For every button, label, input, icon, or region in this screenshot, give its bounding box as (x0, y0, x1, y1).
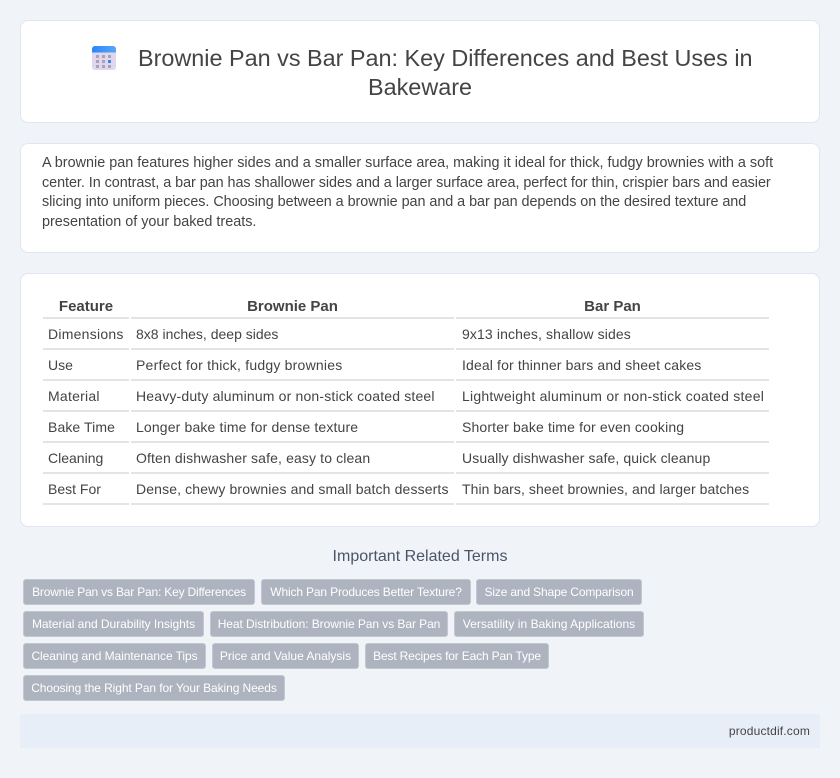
table rows: Bake Time (48, 419, 115, 435)
table rows (43, 317, 769, 505)
footer bar (20, 714, 820, 748)
table rows: 9x13 inches, shallow sides (462, 326, 631, 342)
footer source: productdif.com (729, 724, 810, 738)
comparison table panel (20, 273, 820, 527)
related terms tags: Heat Distribution: Brownie Pan vs Bar Pan (218, 617, 440, 631)
related terms tags: Brownie Pan vs Bar Pan: Key Differences (32, 585, 246, 599)
header panel (20, 20, 820, 123)
table header: Feature (59, 298, 113, 315)
table header (59, 298, 641, 315)
title: Bakeware (368, 74, 472, 100)
table rows: Dimensions (48, 326, 124, 342)
title (138, 45, 753, 100)
related terms tags: Versatility in Baking Applications (463, 617, 635, 631)
title: Brownie Pan vs Bar Pan: Key Differences and Best Uses in (138, 45, 753, 71)
related terms tags: Best Recipes for Each Pan Type (373, 649, 541, 663)
intro paragraph: center. In contrast, a bar pan has shallower sides and a larger surface area, perfect for thin, crispier bars and easier (42, 174, 771, 190)
table rows: Heavy-duty aluminum or non-stick coated steel (136, 388, 435, 404)
related terms tags: Price and Value Analysis (220, 649, 351, 663)
intro paragraph: presentation of your baked treats. (42, 214, 256, 230)
related terms tags: Cleaning and Maintenance Tips (31, 649, 198, 663)
related terms tags: Material and Durability Insights (32, 617, 195, 631)
table rows: Perfect for thick, fudgy brownies (136, 357, 342, 373)
table rows: Best For (48, 481, 101, 497)
intro paragraph: slicing into uniform pieces. Choosing between a brownie pan and a bar pan depends on the desired texture and (42, 194, 746, 210)
intro paragraph: A brownie pan features higher sides and a smaller surface area, making it ideal for thick, fudgy brownies with a soft (42, 155, 773, 171)
table rows: Longer bake time for dense texture (136, 419, 358, 435)
related terms tags: Size and Shape Comparison (484, 585, 634, 599)
related terms tags (23, 579, 644, 701)
table rows: Use (48, 357, 73, 373)
table rows: 8x8 inches, deep sides (136, 326, 278, 342)
table rows: Shorter bake time for even cooking (462, 419, 684, 435)
related terms heading: Important Related Terms (333, 548, 507, 565)
table rows: Material (48, 388, 100, 404)
table rows: Dense, chewy brownies and small batch desserts (136, 481, 449, 497)
table rows: Thin bars, sheet brownies, and larger batches (462, 481, 749, 497)
intro paragraph (42, 155, 774, 230)
table header: Brownie Pan (247, 298, 338, 315)
related terms tags: Which Pan Produces Better Texture? (270, 585, 462, 599)
related terms tags: Choosing the Right Pan for Your Baking Needs (31, 681, 277, 695)
table header: Bar Pan (584, 298, 641, 315)
table rows: Ideal for thinner bars and sheet cakes (462, 357, 701, 373)
intro text panel (20, 143, 820, 253)
icon: calendar (92, 46, 116, 70)
table rows: Often dishwasher safe, easy to clean (136, 450, 370, 466)
table rows: Usually dishwasher safe, quick cleanup (462, 450, 710, 466)
table rows: Lightweight aluminum or non-stick coated steel (462, 388, 764, 404)
table rows: Cleaning (48, 450, 103, 466)
